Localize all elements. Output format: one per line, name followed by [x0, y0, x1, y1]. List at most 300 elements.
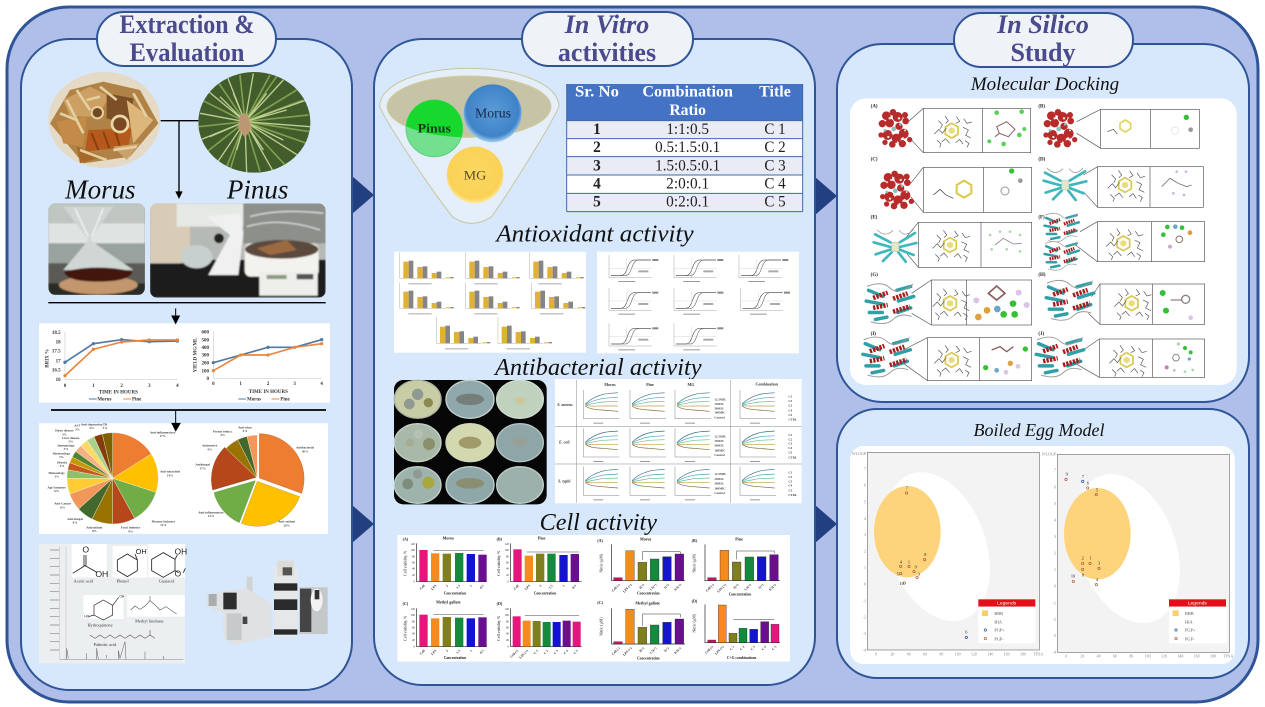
- plot: boiled egg left: 4: [900, 560, 903, 565]
- chart: brix percent: 2: [120, 384, 123, 389]
- antioxidant dose-response curves: [597, 252, 799, 353]
- plot: boiled egg right: PGP-: [1185, 636, 1195, 641]
- chart: methyl gallate viability: Cell: [419, 649, 426, 656]
- arrow: in vitro to in silico (upper): [815, 177, 837, 215]
- plot: boiled egg right: Legends: [1188, 601, 1207, 607]
- pie labels: morus: 3%: [54, 475, 59, 479]
- docking figure: (G): [871, 273, 878, 278]
- plot: boiled egg left: Legends: [997, 601, 1017, 607]
- label: Pinus: Pinus: [226, 174, 288, 204]
- structure: guaiacol: Guaiacol: [159, 578, 175, 583]
- table: combination ratio: [567, 84, 803, 212]
- line charts: brix and yield: [39, 323, 330, 403]
- chart: combinations nitric oxide: (D): [692, 598, 698, 603]
- pie labels: pinus: Anti-ulcer: [238, 425, 253, 429]
- plot: boiled egg left: 7: [864, 466, 866, 471]
- circle: MG: [447, 147, 503, 203]
- chart: combinations viability: 40: [506, 632, 510, 636]
- plot: boiled egg right: 4: [1054, 518, 1056, 523]
- heading pill: in vitro activities: [522, 10, 693, 67]
- structure: methyl linoleate: Methyl linoleate: [135, 618, 164, 623]
- plot: boiled egg right: 40: [1097, 654, 1101, 659]
- chart: yield mg per ml: 1: [239, 382, 242, 387]
- chart: brix percent: 16: [56, 378, 61, 383]
- chart: yield mg per ml: 4: [320, 382, 323, 387]
- table: combination ratio: C 2: [764, 139, 786, 156]
- heading pill: extraction and evaluation: Extraction &: [120, 10, 254, 39]
- pie labels: morus: [47, 422, 180, 533]
- chart: brix percent: Pine: [132, 398, 142, 403]
- antibacterial growth curves: 100MIC: [714, 448, 726, 452]
- petri dishes: [394, 380, 547, 504]
- chart: morus viability: Cell viability %: [403, 550, 408, 576]
- chart: pine nitric oxide: [692, 537, 780, 597]
- table: combination ratio: Combination: [642, 84, 733, 101]
- plot: boiled egg left: 3: [918, 572, 920, 577]
- plot: boiled egg right: 5: [1054, 501, 1056, 506]
- chart: methyl gallate nitric oxide: Methyl gallate: [635, 600, 660, 605]
- plot: boiled egg left: 0: [875, 652, 877, 657]
- circle: MG: MG: [464, 168, 486, 182]
- photo: rotary evaporator: [150, 203, 326, 298]
- chart: combinations nitric oxide: C 1: [729, 645, 736, 651]
- plot: boiled egg right: 20: [1080, 654, 1084, 659]
- antibacterial growth curves: 100MIC: [714, 486, 726, 490]
- antibacterial growth curves: 50MIC: [714, 406, 725, 410]
- charts and pies, chemistry: [39, 308, 330, 663]
- chart: combinations nitric oxide: C 5: [771, 645, 778, 651]
- antibacterial growth curves: C2: [788, 399, 793, 403]
- table: combination ratio: C 4: [764, 175, 786, 192]
- plot: boiled egg left: -3: [863, 631, 866, 636]
- chart: methyl gallate viability: Cell viability %: [403, 615, 408, 641]
- chart: morus nitric oxide: Morus: [640, 537, 652, 542]
- antibacterial growth curves: 12.5MIC: [714, 434, 727, 438]
- circle: Morus: Morus: [475, 105, 511, 120]
- plot: boiled egg right: 3: [1098, 561, 1100, 566]
- pie labels: morus: 3%: [68, 440, 73, 444]
- chart: combinations viability: 80: [506, 619, 510, 623]
- pie labels: pinus: 17%: [200, 466, 206, 470]
- photo: morus bark chips: [48, 72, 161, 169]
- chart: morus viability: 2: [445, 584, 449, 588]
- pie labels: pinus: 13%: [208, 514, 214, 518]
- pie labels: morus: Anti-inflammatory: [150, 430, 176, 434]
- plot: boiled egg right: 120: [1161, 654, 1167, 659]
- chart: morus nitric oxide: Concentration: [637, 591, 660, 595]
- table: combination ratio: 1.5:0.5:0.1: [655, 157, 720, 174]
- chart: pine nitric oxide: (B): [692, 538, 698, 543]
- arrow: extraction to in vitro (upper): [352, 176, 374, 214]
- chart: methyl gallate viability: LPS: [430, 649, 437, 656]
- heading: cell activity: Cell activity: [540, 510, 657, 536]
- chart: combinations viability: [496, 601, 582, 660]
- table: combination ratio: 1: [593, 121, 601, 138]
- chart: methyl gallate viability: 80: [412, 619, 416, 623]
- chart: morus viability: Concentration: [444, 591, 466, 595]
- docking panel A: [878, 108, 1031, 153]
- chart: pine viability: 1: [562, 584, 566, 588]
- plot: boiled egg left: TPSA: [1033, 652, 1043, 657]
- pie labels: morus: Antioxidant: [86, 525, 103, 529]
- antibacterial growth curves: 100MIC: [714, 411, 726, 415]
- pie labels: morus: Obesity: [57, 460, 68, 464]
- chart: yield mg per ml: 2: [267, 382, 270, 387]
- heading: boiled egg model: Boiled Egg Model: [974, 420, 1104, 440]
- chart: methyl gallate nitric oxide: Nitric (μM): [598, 617, 603, 636]
- chart: methyl gallate viability: 60: [412, 625, 416, 629]
- plot: boiled egg left: 140: [987, 652, 993, 657]
- plot: boiled egg right: 7: [1082, 474, 1085, 479]
- photo: pinus needles: [198, 72, 311, 173]
- pie labels: morus: Anti-Cancer: [54, 502, 72, 506]
- chart: methyl gallate viability: [403, 599, 487, 660]
- chart: yield mg per ml: 600: [202, 330, 209, 335]
- docking figure: (C): [871, 158, 878, 163]
- structure: phenol: Phenol: [117, 578, 129, 583]
- antibacterial growth curves: C3: [788, 404, 793, 408]
- arrow to charts: [172, 308, 179, 323]
- pie labels: morus: 3%: [89, 426, 94, 430]
- chart: yield mg per ml: 0: [206, 377, 209, 382]
- plot: boiled egg left: 9: [915, 564, 917, 569]
- chart: pine viability: 80: [506, 554, 510, 558]
- pie labels: pinus: Antitussive: [202, 444, 218, 448]
- plot: boiled egg left: BBB: [994, 611, 1003, 616]
- chart: morus viability: 40: [412, 567, 416, 571]
- chart: combinations viability: Cell (-): [509, 649, 519, 659]
- chart: combinations viability: 0: [507, 644, 509, 648]
- chart: brix percent: 16.5: [52, 369, 61, 374]
- pie labels: morus: 17%: [160, 434, 166, 438]
- chart: pine viability: 1.5: [548, 584, 554, 590]
- chart: pine nitric oxide: 2(+): [732, 583, 739, 590]
- chart: morus nitric oxide: 0.5(+): [673, 583, 682, 592]
- chart: combinations nitric oxide: Nitric (μM): [692, 613, 697, 633]
- chart: brix percent: 1: [92, 384, 95, 389]
- heading: antibacterial activity: Antibacterial activity: [493, 355, 702, 381]
- docking panel F: [1045, 213, 1205, 270]
- antibacterial growth curves: CTRL: [788, 418, 797, 422]
- chart: methyl gallate nitric oxide: 0.5(+): [673, 646, 682, 655]
- structure: methyl linoleate: [131, 596, 177, 623]
- chart: combinations viability: LPS (+): [518, 649, 529, 660]
- structure: hydroquinone: [84, 595, 125, 628]
- plot: boiled egg left: 6: [864, 483, 866, 488]
- chart: morus nitric oxide: Cell (-): [611, 583, 621, 593]
- chart: yield mg per ml: TIME IN HOURS: [249, 390, 288, 395]
- arrow: in vitro to in silico (lower): [815, 505, 837, 543]
- pie labels: morus: 14%: [167, 473, 173, 477]
- plot: boiled egg right: -4: [1053, 649, 1056, 654]
- chart: pine viability: LPS: [524, 584, 531, 591]
- antibacterial growth curves: C3: [788, 442, 793, 446]
- chart: brix percent: 18: [56, 340, 61, 345]
- plot: boiled egg left: 1: [908, 560, 910, 565]
- plot: boiled egg left: 0: [864, 582, 866, 587]
- chart: morus nitric oxide: 1.5(+): [649, 583, 657, 592]
- chart: pine nitric oxide: LPS (+): [716, 583, 727, 594]
- pie labels: pinus: 4%: [243, 429, 247, 433]
- pie labels: morus: Food Industry: [121, 526, 141, 530]
- pie labels: pinus: Antibacterial: [296, 446, 314, 450]
- antibacterial growth curves: C5: [788, 488, 793, 492]
- heading: antioxidant activity: Antioxidant activity: [494, 222, 694, 248]
- antibacterial growth curves: 50MIC: [714, 482, 725, 486]
- plot: boiled egg right: 140: [1177, 654, 1183, 659]
- docking panel I: [863, 337, 1032, 381]
- docking panel D: [1044, 167, 1203, 207]
- chart: methyl gallate viability: 1: [469, 649, 473, 653]
- pie labels: pinus: Anti-oxidant: [278, 520, 296, 524]
- plot: boiled egg left: 20: [890, 652, 894, 657]
- chart: yield mg per ml: Morus: [247, 398, 261, 403]
- pie labels: morus: 3%: [60, 464, 64, 468]
- chart: pine viability: [496, 535, 582, 595]
- divider line: [51, 407, 326, 412]
- pie labels: morus: Pharma Industry: [152, 519, 175, 523]
- chart: combinations viability: C 2: [543, 649, 549, 655]
- plot: boiled egg right: -1: [1053, 600, 1056, 605]
- chart: pine viability: (B): [497, 537, 503, 542]
- pie: pinus uses: [211, 434, 304, 526]
- antibacterial growth curves: C5: [788, 451, 793, 455]
- docking panel C: [880, 167, 1032, 212]
- chart: combinations viability: (D): [497, 601, 503, 606]
- panel: in vitro activities: [374, 10, 815, 685]
- chart: combinations nitric oxide: [692, 598, 780, 660]
- chart: yield mg per ml: 300: [202, 354, 209, 359]
- chart: combinations viability: 120: [505, 607, 509, 611]
- chart: combinations nitric oxide: Cell (-): [704, 645, 714, 655]
- chart: pine viability: 120: [505, 542, 509, 546]
- docking panel B: [1043, 109, 1199, 148]
- table: combination ratio: 0.5:1.5:0.1: [655, 139, 720, 156]
- chart: morus viability: 0.5: [479, 584, 485, 590]
- antibacterial growth curves: C2: [788, 437, 793, 441]
- docking panel E: [874, 222, 1032, 267]
- plot: boiled egg right: 10: [1071, 574, 1075, 579]
- label: Morus: Morus: [64, 174, 136, 204]
- plot: boiled egg right: 3: [1054, 534, 1056, 539]
- chart: yield mg per ml: [194, 330, 323, 403]
- arrow head: [175, 191, 183, 199]
- antibacterial growth curves: Combination: [755, 381, 779, 386]
- antibacterial growth curves: C4: [788, 446, 793, 450]
- plot: boiled egg right: PGP+: [1185, 628, 1196, 633]
- antibacterial growth curves: [555, 379, 802, 503]
- chart: pine viability: 40: [506, 567, 510, 571]
- structure: acetic acid: Acetic acid: [74, 578, 94, 583]
- divider line: [48, 301, 326, 305]
- pie labels: pinus: Antifungal: [195, 463, 210, 467]
- pie labels: morus: Agri Industry: [47, 485, 66, 489]
- plot: boiled egg left: 5: [897, 572, 899, 577]
- plot: boiled egg left: 40: [907, 652, 911, 657]
- pie labels: morus: Dermatology: [53, 451, 71, 455]
- plot: boiled egg left: WLOGP: [852, 451, 867, 456]
- plot: boiled egg left: 180: [1020, 652, 1026, 657]
- antibacterial growth curves: 50MIC: [714, 444, 725, 448]
- pie labels: morus: 3%: [75, 427, 80, 431]
- plot: boiled egg right: WLOGP: [1042, 451, 1057, 456]
- structure: hydroquinone: Hydroquinone: [87, 623, 113, 628]
- table: combination ratio: 1:1:0.5: [666, 121, 709, 138]
- plot: boiled egg right: 7: [1054, 468, 1056, 473]
- pie labels: pinus: 4%: [220, 433, 225, 437]
- chart: morus viability: 120: [411, 542, 415, 546]
- plot: boiled egg right: -3: [1053, 633, 1056, 638]
- pie labels: morus: Anti-fungal: [67, 517, 83, 521]
- pie labels: morus: Liver disease: [62, 436, 80, 440]
- chart: yield mg per ml: 3: [293, 382, 296, 387]
- chart: morus viability: 100: [411, 548, 415, 552]
- chart: morus viability: Morus: [443, 535, 454, 540]
- chart: pine viability: Concentration: [534, 591, 556, 595]
- chart: morus viability: 1.5: [455, 584, 461, 590]
- chart: pine nitric oxide: Concentration: [729, 593, 751, 597]
- chart: morus nitric oxide: [597, 537, 685, 595]
- pie labels: morus: Anti-microbial: [160, 470, 180, 474]
- table: combination ratio: Ratio: [669, 102, 706, 119]
- pie labels: morus: Heart disease: [55, 429, 74, 433]
- structure: palmitic acid: Palmitic acid: [94, 642, 117, 647]
- chart: morus nitric oxide: 2(+): [638, 583, 645, 590]
- plot: boiled egg left: 7: [906, 485, 909, 490]
- pie labels: morus: 6%: [54, 489, 59, 493]
- plot: boiled egg left: PGP-: [994, 636, 1004, 641]
- panel: boiled egg model: [837, 409, 1249, 678]
- plot: boiled egg right: -2: [1053, 617, 1056, 622]
- antibacterial growth curves: Control: [714, 453, 725, 457]
- table: combination ratio: 3: [593, 157, 601, 174]
- antibacterial growth curves: 25MIC: [714, 477, 725, 481]
- pie labels: morus: Immunology: [57, 443, 75, 447]
- funnel: [380, 68, 559, 223]
- circle: Pinus: [406, 100, 463, 157]
- structure: guaiacol: O: [175, 569, 182, 579]
- pie labels: pinus: Anti-inflammatory: [198, 510, 224, 514]
- plot: boiled egg right: HIA: [1185, 619, 1194, 624]
- funnel rim: [387, 76, 551, 137]
- chart: morus viability: (A): [403, 537, 409, 542]
- antibacterial growth curves: C4: [788, 484, 793, 488]
- table: combination ratio: C 3: [764, 157, 786, 174]
- heading pill: in silico study: [954, 10, 1133, 67]
- structure: hydroquinone: OH: [119, 595, 125, 599]
- arrow: extraction to in vitro (lower): [352, 505, 374, 543]
- pie labels: morus: 6%: [73, 521, 77, 525]
- chart: morus viability: LPS: [430, 584, 437, 591]
- pie labels: morus: 3%: [59, 455, 64, 459]
- antibacterial growth curves: C1: [788, 433, 793, 437]
- table: combination ratio: Sr. No: [575, 84, 619, 101]
- chart: brix percent: Morus: [97, 398, 112, 403]
- chart: pine nitric oxide: Cell (-): [705, 583, 715, 593]
- chart: combinations viability: 20: [506, 638, 510, 642]
- chart: pine nitric oxide: 1.5(+): [743, 583, 752, 592]
- chart: combinations nitric oxide: C 2: [739, 645, 746, 651]
- photo: flask with extract: [48, 203, 145, 295]
- plot: boiled egg right: 80: [1129, 654, 1133, 659]
- heading pill: in vitro activities: In Vitro: [564, 10, 649, 39]
- pie labels: morus: 11%: [160, 523, 166, 527]
- photos and plant labels: [48, 72, 326, 303]
- table: combination ratio: C 5: [764, 193, 786, 210]
- plot: boiled egg left: 8: [924, 552, 926, 557]
- chart: pine nitric oxide: 0.5(+): [768, 583, 777, 592]
- chart: combinations nitric oxide: C 4: [761, 645, 767, 651]
- chart: combinations viability: C 1: [533, 649, 539, 655]
- chart: brix percent: 17.5: [52, 350, 61, 355]
- chart: combinations viability: C 3: [553, 649, 559, 655]
- plot: boiled egg left: 3: [864, 532, 866, 537]
- plot: boiled egg right: 2: [1054, 551, 1056, 556]
- antibacterial growth curves: C1: [788, 394, 793, 398]
- chart: pine viability: 2: [538, 584, 543, 588]
- docking figure: (E): [871, 215, 878, 220]
- chart: yield mg per ml: 200: [202, 361, 209, 366]
- chart: morus viability: [403, 535, 487, 595]
- plot: boiled egg left: 100: [955, 652, 961, 657]
- antibacterial growth curves: CTRL: [788, 493, 797, 497]
- pie labels: morus: 6%: [60, 505, 65, 509]
- chart: methyl gallate viability: 100: [411, 613, 415, 617]
- chart: brix percent: 3: [148, 384, 151, 389]
- chart: yield mg per ml: 500: [202, 338, 209, 343]
- plot: boiled egg left: -2: [863, 615, 866, 620]
- antibacterial growth curves: 25MIC: [714, 439, 725, 443]
- chart: morus nitric oxide: (A): [597, 538, 604, 543]
- circle: Morus: [464, 84, 522, 142]
- chart: combinations viability: 100: [505, 613, 509, 617]
- chart: yield mg per ml: 0: [212, 382, 215, 387]
- table: combination ratio: C 1: [764, 121, 786, 138]
- chart: morus viability: 60: [412, 560, 416, 564]
- cell viability and nitric oxide bar charts: [397, 535, 790, 662]
- plot: boiled egg right: 60: [1113, 654, 1117, 659]
- chart: brix percent: 18.5: [52, 331, 61, 336]
- antibacterial growth curves: 12.5MIC: [714, 397, 727, 401]
- plot: boiled egg right: 8: [1082, 573, 1084, 578]
- plot: boiled egg right: 2: [1082, 555, 1084, 560]
- chart: combinations viability: Cell viability %: [496, 615, 501, 641]
- chart: combinations viability: C 5: [573, 649, 579, 655]
- plot: boiled egg left: [852, 451, 1043, 657]
- heading: molecular docking: Molecular Docking: [970, 74, 1119, 95]
- pie labels: morus: 9%: [128, 529, 133, 533]
- antibacterial growth curves: Control: [714, 491, 725, 495]
- chart: combinations viability: 60: [506, 625, 510, 629]
- chart: pine nitric oxide: Nitric (μM): [692, 553, 697, 573]
- chart: pine viability: Pine: [538, 535, 546, 540]
- pie labels: morus: Hematology: [49, 471, 65, 475]
- pie labels: morus: TB: [103, 422, 108, 426]
- chart: combinations viability: C 4: [563, 649, 569, 655]
- chart: morus nitric oxide: 1(+): [663, 583, 670, 590]
- plot: boiled egg right: 5: [1096, 488, 1098, 493]
- plot: boiled egg right: 4: [1096, 577, 1099, 582]
- chart: morus viability: 20: [412, 573, 416, 577]
- docking panel H: [1046, 280, 1205, 324]
- chart: morus viability: Cell: [419, 584, 426, 591]
- chart: pine viability: 60: [506, 560, 510, 564]
- chart: morus viability: 1: [469, 584, 473, 588]
- chart: yield mg per ml: 100: [202, 369, 209, 374]
- pie labels: pinus: 4%: [207, 447, 212, 451]
- plot: boiled egg left: 160: [1004, 652, 1010, 657]
- antibacterial growth curves: MG: [688, 382, 694, 387]
